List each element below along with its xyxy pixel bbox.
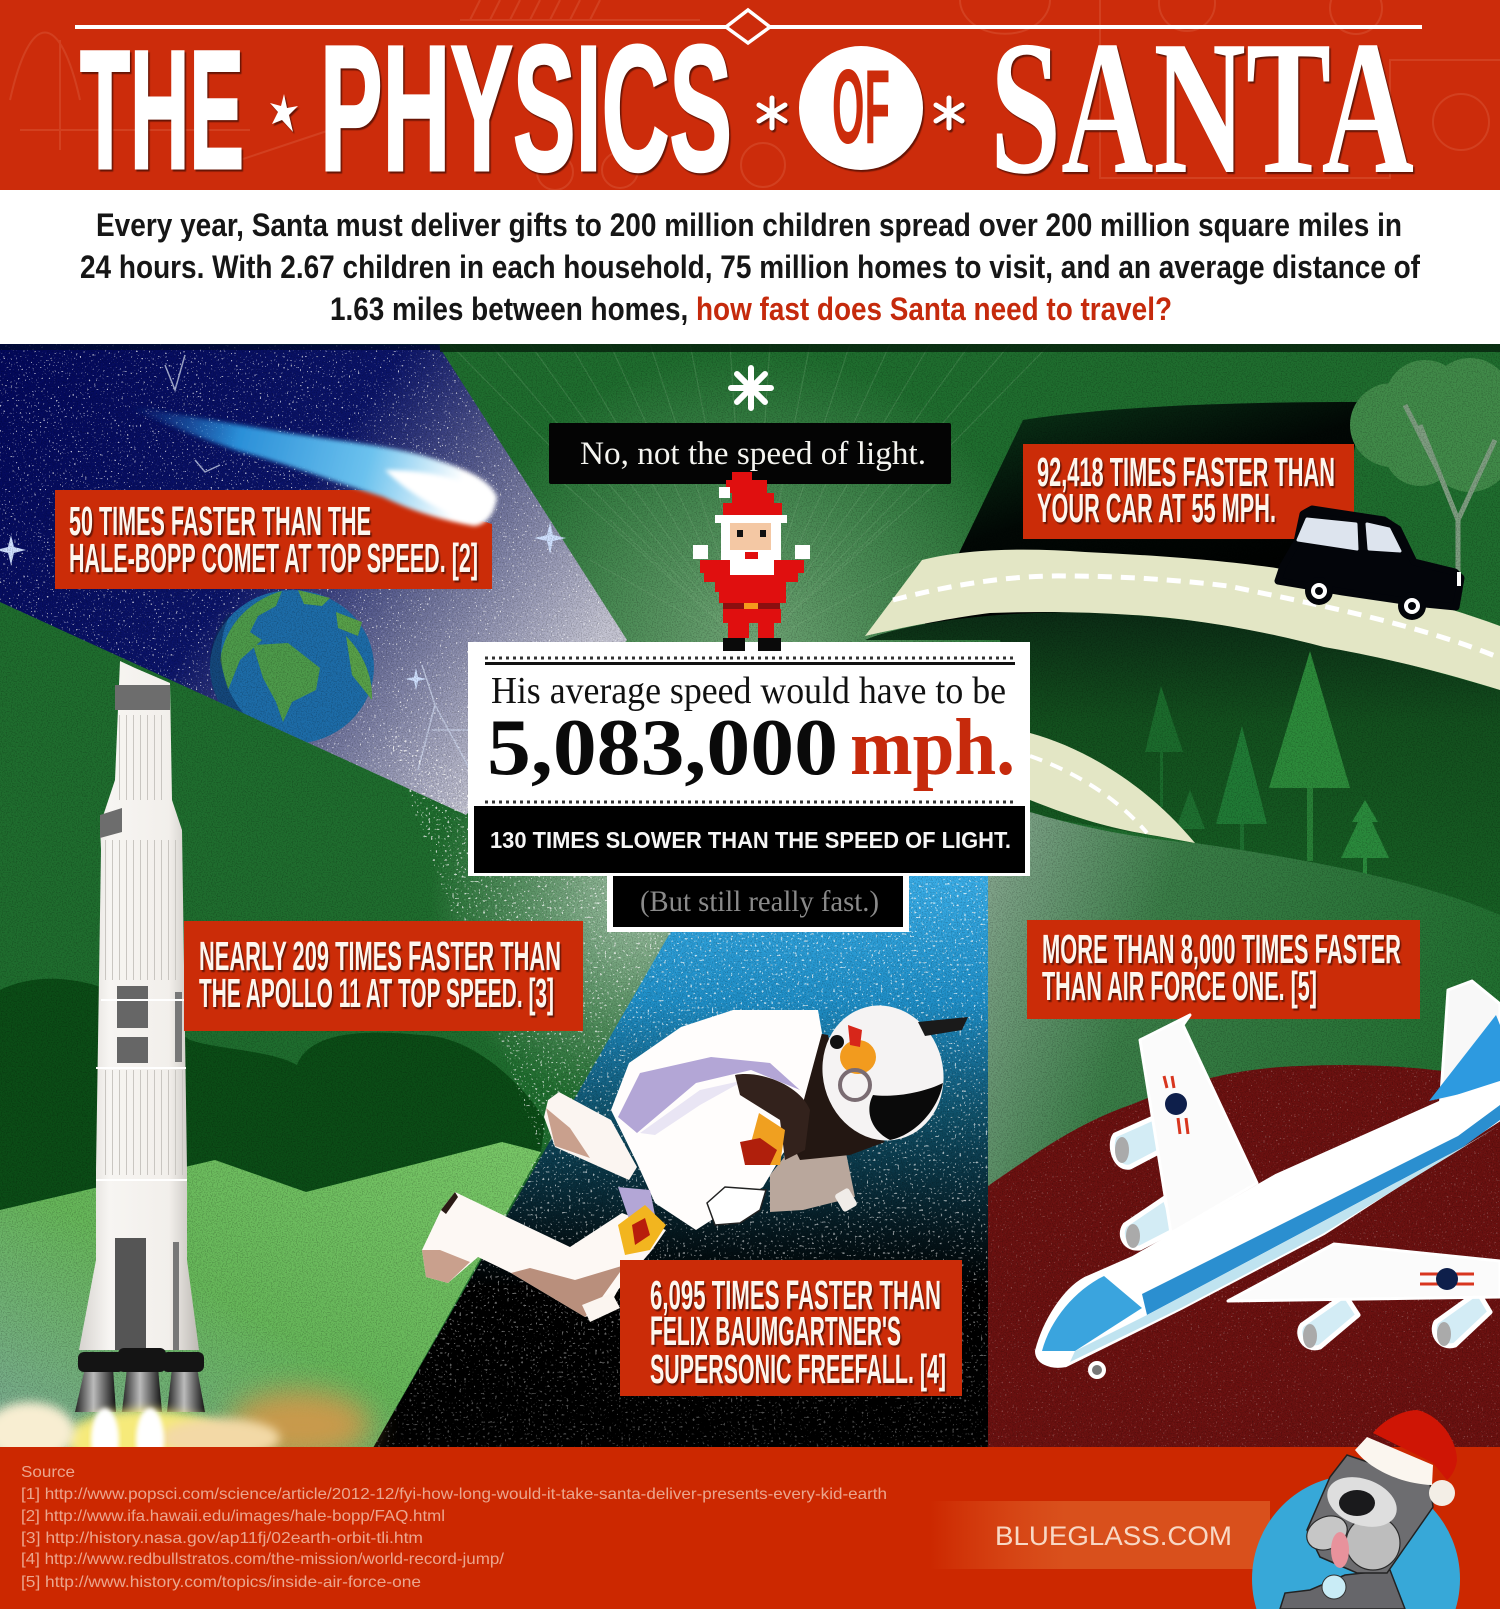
- icon: black car: [1278, 509, 1461, 620]
- callout: apollo: [184, 921, 583, 1031]
- title: PHYSICS: [320, 8, 732, 208]
- dog mascot: [1252, 1410, 1460, 1609]
- callout: apollo: NEARLY 209 TIMES FASTER THAN: [199, 933, 561, 979]
- speckled stars: [373, 720, 993, 1448]
- rocket: [75, 661, 205, 1412]
- bright green hill: [0, 1142, 541, 1448]
- source list: [3] http://history.nasa.gov/ap11fj/02earth-orbit-tli.htm: [21, 1530, 423, 1547]
- airplane: [1037, 981, 1500, 1377]
- sparkle stars: [0, 522, 566, 690]
- callout: car: YOUR CAR AT 55 MPH.: [1037, 485, 1276, 531]
- tail: [1440, 981, 1500, 1110]
- callout: air force one: [1027, 920, 1420, 1019]
- earth: [210, 590, 374, 744]
- nose gear: [1090, 1363, 1104, 1377]
- title: THE: [80, 15, 244, 204]
- skydiver: [422, 992, 968, 1322]
- header band: [0, 0, 1500, 190]
- dog head: [1307, 1455, 1433, 1573]
- intro text: [80, 207, 1420, 327]
- grain overlay: [0, 344, 1500, 1448]
- source list: Source: [21, 1464, 75, 1481]
- helmet: [807, 992, 968, 1154]
- boot: [582, 1293, 620, 1322]
- callout: comet: 50 TIMES FASTER THAN THE: [69, 498, 371, 544]
- logo text: BLUEGLASS.COM: [995, 1521, 1232, 1551]
- fuselage: [1037, 1083, 1500, 1366]
- arm: [544, 1092, 637, 1180]
- callout: felix: SUPERSONIC FREEFALL. [4]: [650, 1346, 946, 1392]
- pixel Santa: [693, 472, 810, 638]
- black bar: 130 TIMES SLOWER THAN THE SPEED OF LIGHT.: [490, 827, 1011, 853]
- constellation: [165, 355, 470, 770]
- wings: [1140, 1015, 1257, 1233]
- central speed card: [468, 638, 1030, 876]
- scene background: [0, 344, 1500, 1448]
- callout: felix: 6,095 TIMES FASTER THAN: [650, 1272, 941, 1318]
- lower road segment: [1030, 733, 1195, 843]
- intro text: 1.63 miles between homes, how fast does Santa need to travel?: [330, 291, 1172, 327]
- source list: [5] http://www.history.com/topics/inside-air-force-one: [21, 1574, 421, 1591]
- lead text: His average speed would have to be: [491, 670, 1006, 712]
- box: no, not the speed of light: [549, 423, 951, 484]
- blue space panel: [373, 876, 988, 1448]
- santa boots: [723, 638, 781, 651]
- callout: comet: HALE-BOPP COMET AT TOP SPEED. [2]: [69, 535, 478, 581]
- speed number: 5,083,000: [487, 704, 838, 792]
- source list: [21, 1464, 887, 1591]
- left forest silhouette: [0, 979, 545, 1210]
- maroon hill right: [988, 1060, 1500, 1450]
- logo band: [930, 1501, 1270, 1569]
- continents: [220, 591, 282, 690]
- title: [80, 1, 1414, 214]
- dark hill with trees: [865, 612, 1500, 930]
- tree top right: [1350, 358, 1500, 575]
- glove: [707, 1187, 766, 1225]
- engines: [1112, 1115, 1490, 1348]
- road: [865, 550, 1500, 690]
- title: OF: [832, 48, 890, 166]
- comet: [125, 405, 497, 526]
- stars: [0, 344, 640, 824]
- grey green hill right: [988, 800, 1500, 1448]
- callout: apollo: THE APOLLO 11 AT TOP SPEED. [3]: [199, 970, 554, 1016]
- box: but still really fast: (But still really fast.): [640, 885, 879, 918]
- rocket exhaust clouds: [0, 1391, 370, 1472]
- roundels: [1164, 1076, 1474, 1290]
- santa hat: [1373, 1410, 1457, 1480]
- leg: [422, 1192, 666, 1317]
- callout: car: [1023, 444, 1354, 539]
- pine trees: [1145, 651, 1389, 874]
- box: but still really fast: [607, 876, 909, 932]
- speckle glow near card: [400, 800, 720, 1160]
- space wedge: [0, 344, 640, 824]
- dog body: [1280, 1570, 1405, 1609]
- faint physics doodles: [10, 0, 1500, 190]
- dog muzzle: [1301, 1468, 1404, 1570]
- top dark edge: [440, 344, 1500, 352]
- source list: [2] http://www.ifa.hawaii.edu/images/hale-bopp/FAQ.html: [21, 1508, 445, 1525]
- chest pack: [770, 1143, 855, 1212]
- footer band: [0, 1447, 1500, 1609]
- dotted rules: [485, 656, 1015, 660]
- box: no, not the speed of light: No, not the speed of light.: [580, 436, 926, 472]
- black road-side wedge: [922, 402, 1362, 630]
- black bar: [474, 806, 1025, 873]
- rocket engines: [75, 1348, 205, 1412]
- diamond ornament: [726, 10, 770, 43]
- white intro panel: [0, 190, 1500, 344]
- torso: [611, 1010, 822, 1230]
- neck dark: [780, 1030, 885, 1160]
- callout: comet: [55, 490, 492, 589]
- callout: felix: FELIX BAUMGARTNER'S: [650, 1308, 901, 1354]
- green rays behind Santa: [450, 344, 1050, 650]
- unit: mph.: [850, 704, 1015, 792]
- top rule: [75, 25, 1422, 29]
- source list: [1] http://www.popsci.com/science/article/2012-12/fyi-how-long-would-it-take-santa-deliver-presents-every-kid-earth: [21, 1486, 887, 1503]
- callout: felix: [620, 1260, 962, 1396]
- snowflake ornament: [731, 368, 771, 408]
- source list: [4] http://www.redbullstratos.com/the-mission/world-record-jump/: [21, 1551, 505, 1568]
